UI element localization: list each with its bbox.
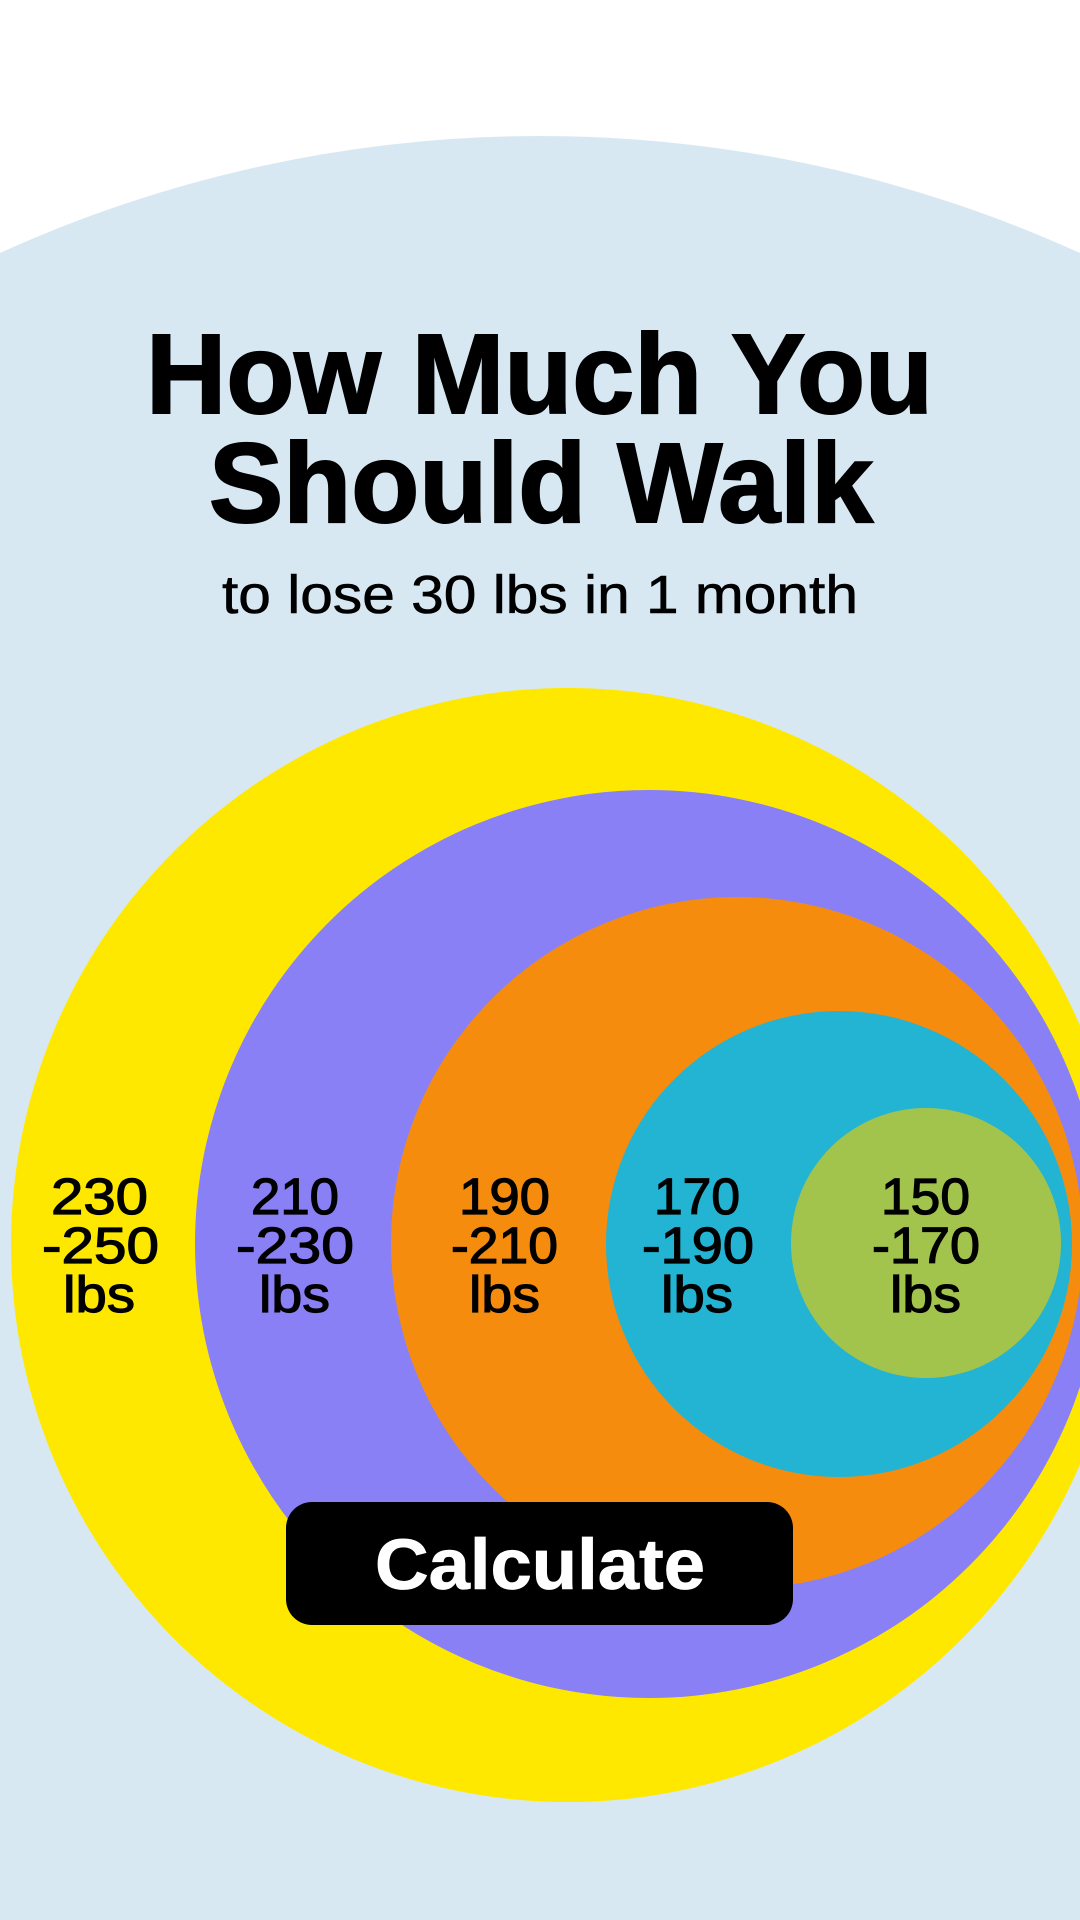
label: 150-170 lbs: -170	[872, 1217, 980, 1274]
button: Calculate: Calculate	[375, 1526, 705, 1605]
button: Calculate	[286, 1502, 793, 1625]
label: 210-230 lbs: 210	[251, 1168, 339, 1225]
circle: 190-210 lbs	[391, 897, 1080, 1589]
label: 210-230 lbs: -230	[236, 1217, 354, 1274]
label: 190-210 lbs: 190	[459, 1168, 550, 1225]
circle: 210-230 lbs	[195, 790, 1080, 1698]
title: Should Walk	[209, 420, 873, 546]
label: 170-190 lbs: lbs	[661, 1266, 733, 1323]
label: 190-210 lbs: lbs	[469, 1266, 540, 1323]
circle: 230-250 lbs	[11, 688, 1080, 1802]
label: 170-190 lbs: 170	[654, 1168, 740, 1225]
circle: 150-170 lbs	[791, 1108, 1061, 1378]
label: 230-250 lbs: 230	[51, 1168, 148, 1225]
label: 230-250 lbs: lbs	[63, 1266, 135, 1323]
label: 170-190 lbs: -190	[642, 1217, 754, 1274]
label: 150-170 lbs: 150	[881, 1168, 970, 1225]
subtitle: to lose 30 lbs in 1 month	[222, 565, 858, 625]
label: 170-190 lbs	[642, 1168, 754, 1323]
title	[146, 311, 933, 546]
label: 150-170 lbs	[872, 1168, 980, 1323]
label: 190-210 lbs	[451, 1168, 558, 1323]
label: 210-230 lbs: lbs	[259, 1266, 330, 1323]
label: 190-210 lbs: -210	[451, 1217, 558, 1274]
label: 150-170 lbs: lbs	[890, 1266, 961, 1323]
title: How Much You	[146, 311, 933, 437]
circle: 170-190 lbs	[606, 1011, 1072, 1477]
label: 210-230 lbs	[236, 1168, 354, 1323]
label: 230-250 lbs	[42, 1168, 159, 1323]
label: 230-250 lbs: -250	[42, 1217, 159, 1274]
